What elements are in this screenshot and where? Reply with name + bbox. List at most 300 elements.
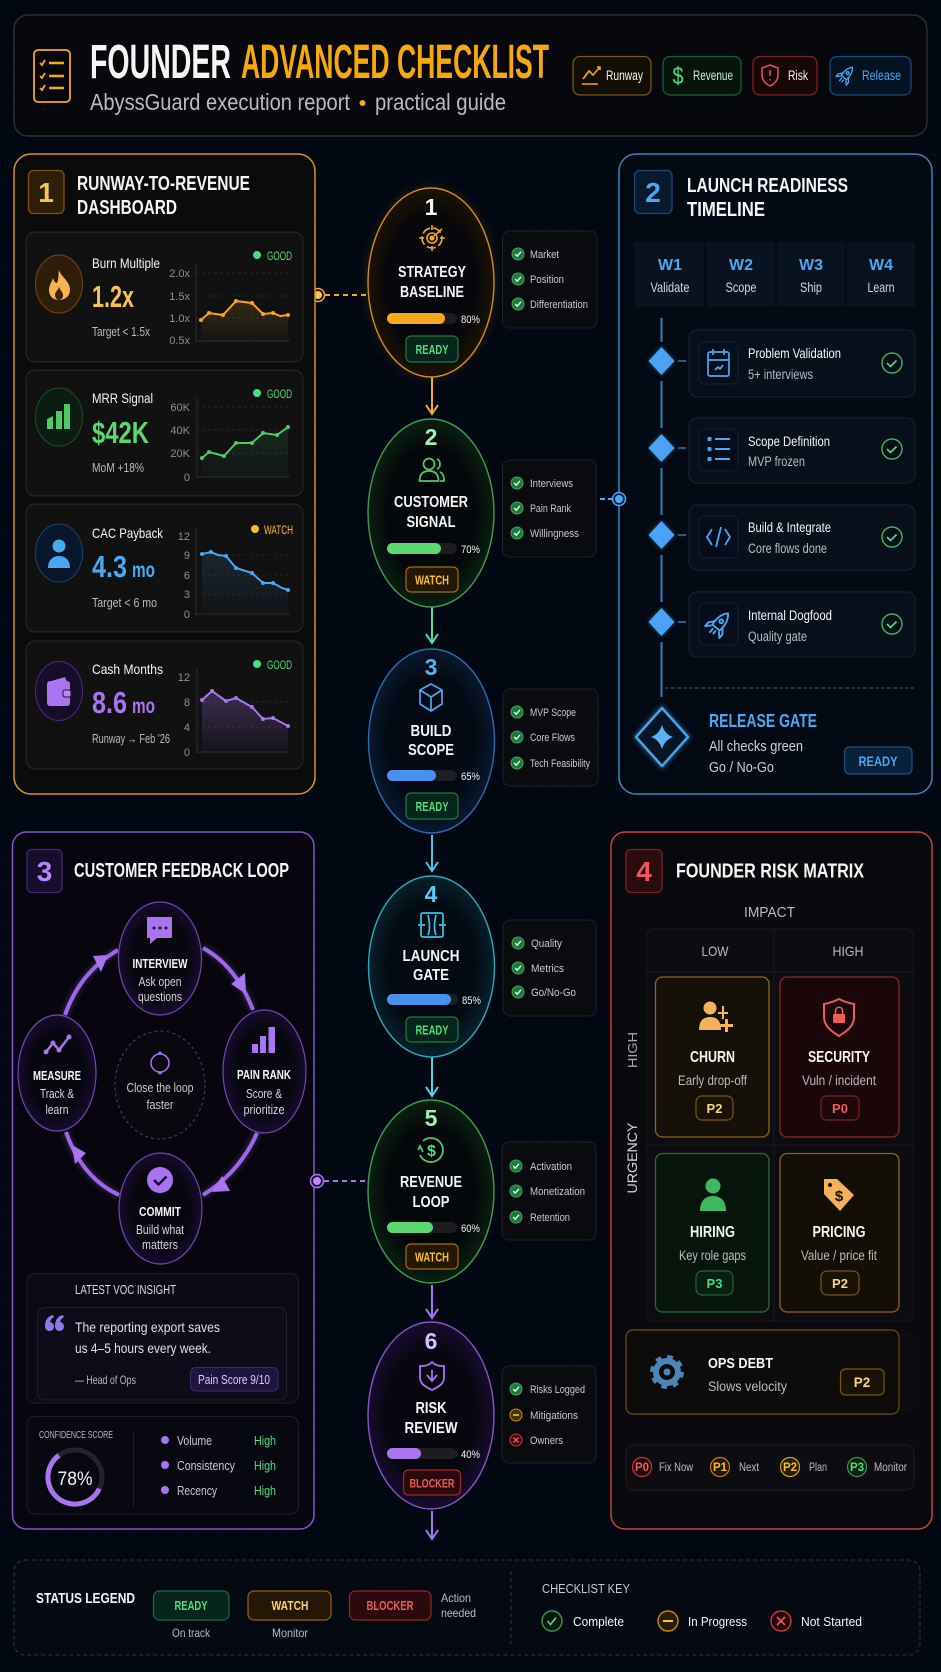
checklist: risk review: [502, 1366, 596, 1463]
chip: runway: [573, 56, 651, 95]
step 5: revenue loop: REVENUE: [400, 1174, 462, 1191]
icon: gate diamond: [636, 708, 688, 766]
card: internal dogfood: Quality gate: [748, 629, 807, 644]
cell: hiring: P3: [707, 1276, 722, 1291]
checklist: launch gate: [503, 920, 596, 1016]
icon: bars: [36, 388, 82, 446]
card: mrr signal: [26, 370, 303, 496]
node: interview: Ask open: [138, 975, 182, 989]
status: good: [253, 251, 292, 263]
icon: dollar loop: [418, 1138, 443, 1162]
matrix grid: [647, 929, 913, 1321]
checklist: risk review: Risks Logged: [530, 1384, 585, 1396]
badge 3: 3: [37, 856, 52, 887]
card: problem validation: [689, 330, 915, 397]
step 1: strategy baseline: 1: [425, 194, 438, 220]
step 2: customer signal: SIGNAL: [406, 514, 456, 531]
status: good: [253, 660, 292, 672]
step 6: risk review: RISK: [416, 1400, 447, 1417]
confidence factors: [161, 1434, 276, 1498]
confidence score: CONFIDENCE SCORE: [39, 1430, 113, 1441]
chip: runway: Runway: [606, 68, 643, 83]
connector: step 2 to timeline: [600, 498, 612, 500]
progress bar 80%: 80%: [461, 314, 480, 326]
progress bar 85%: 85%: [462, 995, 481, 1007]
metric text: MRR Signal: [92, 390, 153, 406]
checklist: strategy baseline: Differentiation: [530, 299, 588, 311]
matrix grid: LOW: [702, 943, 729, 959]
checklist: risk review: Owners: [530, 1435, 563, 1447]
checklist: customer signal: [502, 460, 596, 557]
line chart: cac: [178, 528, 290, 621]
release gate: All checks green: [709, 738, 803, 755]
icon: shield lock: [824, 999, 854, 1036]
card: problem validation: 5+ interviews: [748, 367, 813, 382]
checklist key: CHECKLIST KEY: [542, 1581, 630, 1596]
heading: [687, 175, 848, 221]
progress bar 60%: [387, 1222, 480, 1235]
icon: wallet: [36, 662, 82, 720]
step 5: revenue loop: LOOP: [412, 1194, 450, 1211]
node: interview: INTERVIEW: [132, 957, 188, 971]
cell: churn: P2: [707, 1101, 722, 1116]
line chart: mrr: 40K: [170, 425, 191, 437]
card: cac payback: [26, 504, 303, 632]
release gate: Go / No-Go: [709, 759, 774, 776]
icon: dollar loop: $: [427, 1143, 436, 1160]
icon: checklist: [34, 50, 70, 102]
cell: hiring: HIRING: [690, 1224, 735, 1241]
status: blocker: BLOCKER: [410, 1476, 455, 1490]
arrow: step 3 to 4: [426, 835, 438, 871]
badge 1: 1: [38, 177, 54, 208]
voc insight: Pain Score 9/10: [198, 1373, 270, 1387]
node: measure: learn: [46, 1103, 69, 1117]
checklist key: In Progress: [688, 1614, 747, 1629]
progress bar 85%: [387, 994, 481, 1007]
confidence factors: Recency: [177, 1484, 218, 1498]
status: good: GOOD: [267, 389, 292, 401]
icon: person: [700, 1178, 726, 1211]
checklist: customer signal: Interviews: [530, 478, 573, 490]
cell: churn: CHURN: [690, 1049, 735, 1066]
status legend: [36, 1591, 476, 1640]
checklist: launch gate: Metrics: [531, 963, 564, 975]
center note: Close the loop: [126, 1081, 194, 1095]
checklist: launch gate: Quality: [531, 938, 562, 950]
card: cash months: [26, 641, 303, 769]
status: watch: [406, 1244, 458, 1269]
heading: LAUNCH READINESS: [687, 175, 848, 197]
panel: runway-to-revenue dashboard: [14, 154, 315, 794]
metric text: Burn Multiple: [92, 255, 160, 271]
metric text: Target < 6 mo: [92, 595, 157, 610]
confidence factors: High: [254, 1459, 276, 1473]
progress bar 40%: [387, 1448, 480, 1461]
card: build and integrate: [689, 505, 915, 570]
progress bar 70%: 70%: [461, 544, 480, 556]
priority legend: P2: [783, 1462, 797, 1474]
release gate: READY: [858, 753, 898, 769]
icon: person plus: [699, 1002, 733, 1032]
status: watch: [406, 567, 458, 592]
step 1: strategy baseline: STRATEGY: [398, 264, 466, 281]
badge 1: [28, 170, 64, 214]
arrow: step 6 onward: [426, 1511, 438, 1539]
metric text: Cash Months: [92, 661, 163, 677]
node: interview: questions: [138, 990, 182, 1004]
checklist: customer signal: Pain Rank: [530, 503, 571, 515]
week tabs: W1: [658, 257, 682, 274]
node: pain rank: Score &: [246, 1087, 283, 1101]
line chart: cac: 9: [184, 550, 190, 562]
icon: calendar: [708, 349, 729, 376]
connector node: [612, 492, 626, 506]
line chart: mrr: 60K: [170, 402, 191, 414]
chip: release: Release: [862, 68, 901, 83]
metric text: [92, 255, 160, 339]
cell: ops debt: [626, 1330, 913, 1414]
icon: gear: [652, 1358, 682, 1386]
node: pain rank: [223, 1010, 306, 1133]
confidence factors: Volume: [177, 1434, 212, 1448]
badge 3: [27, 850, 62, 892]
heading: FOUNDER RISK MATRIX: [676, 860, 865, 882]
week tabs: Ship: [800, 279, 822, 295]
icon: quote: [45, 1315, 64, 1331]
step 1: strategy baseline: [368, 188, 494, 377]
icon: flame: [36, 255, 82, 313]
confidence score: [27, 1416, 298, 1514]
line chart: burn multiple: 0.5x: [169, 335, 190, 347]
metric text: [92, 661, 170, 746]
status: blocker: [404, 1470, 460, 1495]
arrow: step 2 to 3: [426, 607, 438, 643]
node: commit: COMMIT: [139, 1205, 181, 1219]
confidence factors: High: [254, 1434, 276, 1448]
metric text: MoM +18%: [92, 460, 144, 475]
arrow: step 1 to 2: [426, 377, 438, 414]
checklist key: [542, 1581, 862, 1631]
card: scope definition: [689, 418, 915, 483]
step 6: risk review: 6: [425, 1328, 437, 1354]
badge 4: 4: [636, 856, 652, 887]
checklist: revenue loop: [502, 1142, 596, 1240]
priority legend: P1: [713, 1462, 728, 1474]
card: internal dogfood: [689, 592, 915, 657]
priority legend: Next: [739, 1462, 760, 1474]
checklist key: Complete: [573, 1614, 624, 1629]
voc insight: — Head of Ops: [75, 1373, 136, 1387]
week tabs: Learn: [868, 279, 894, 295]
heading: TIMELINE: [687, 199, 765, 221]
priority legend: [626, 1445, 914, 1490]
priority legend: Plan: [809, 1462, 827, 1474]
cell: pricing: P2: [832, 1276, 848, 1291]
status legend: needed: [441, 1606, 476, 1620]
heading: [77, 173, 250, 219]
checklist key: Not Started: [801, 1614, 862, 1629]
heading: RUNWAY-TO-REVENUE: [77, 173, 250, 195]
status: watch: WATCH: [415, 1250, 449, 1264]
status legend: WATCH: [272, 1599, 308, 1613]
status legend panel: [14, 1560, 920, 1655]
connector node: [310, 1174, 324, 1188]
title: [90, 36, 549, 89]
card: burn multiple: [26, 232, 303, 362]
step 5: revenue loop: [368, 1100, 494, 1283]
cell: security: SECURITY: [808, 1049, 871, 1066]
confidence factors: High: [254, 1484, 276, 1498]
chip: revenue: [663, 56, 741, 95]
card: problem validation: Problem Validation: [748, 345, 841, 361]
metric text: $42K: [92, 415, 149, 450]
week tabs: [634, 242, 915, 307]
release gate: RELEASE GATE: [709, 711, 817, 731]
axis label: urgency high: HIGH: [625, 1032, 640, 1068]
status: ready: [406, 336, 458, 362]
icon: rocket: [704, 607, 735, 640]
cell: hiring: Key role gaps: [679, 1248, 746, 1263]
icon: cube: [420, 684, 442, 711]
confidence factors: Consistency: [177, 1459, 236, 1473]
title: ADVANCED CHECKLIST: [241, 36, 549, 89]
cell: pricing: [780, 1154, 899, 1312]
step 6: risk review: [368, 1322, 494, 1509]
icon: target: [419, 225, 445, 251]
voc insight: us 4–5 hours every week.: [75, 1340, 211, 1356]
checklist: build scope: [503, 689, 598, 786]
chip: revenue: Revenue: [693, 68, 733, 83]
priority legend: Monitor: [874, 1462, 907, 1474]
node: commit: matters: [142, 1238, 178, 1252]
line chart: mrr: 20K: [170, 448, 191, 460]
icon: bars: [252, 1027, 275, 1053]
cell: pricing: Value / price fit: [801, 1248, 877, 1263]
status: good: GOOD: [267, 660, 292, 672]
line chart: mrr: 0: [184, 472, 190, 484]
checklist: customer signal: Willingness: [530, 528, 579, 540]
donut: 78%: [48, 1450, 102, 1504]
line chart: burn multiple: 2.0x: [169, 268, 190, 280]
donut: 78%: 78%: [58, 1469, 93, 1490]
release gate: [636, 708, 912, 776]
progress bar 60%: 60%: [461, 1223, 480, 1235]
step 1: strategy baseline: BASELINE: [400, 284, 464, 301]
node: interview: [118, 902, 202, 1015]
priority legend: P3: [850, 1462, 864, 1474]
metric text: 4.3: [92, 549, 127, 584]
axis label: urgency: URGENCY: [624, 1122, 640, 1193]
week tabs: W2: [729, 257, 753, 274]
checklist: revenue loop: Activation: [530, 1161, 572, 1173]
progress bar 65%: [387, 770, 480, 783]
arrow: step 5 to 6: [426, 1285, 438, 1318]
metric text: Target < 1.5x: [92, 324, 150, 339]
status: watch: WATCH: [264, 525, 293, 537]
card: scope definition: Scope Definition: [748, 433, 830, 449]
badge 2: [634, 170, 672, 214]
step 4: launch gate: [368, 876, 494, 1057]
metric text: mo: [132, 559, 155, 582]
checklist: revenue loop: Monetization: [530, 1186, 585, 1198]
card: scope definition: MVP frozen: [748, 454, 805, 469]
status legend: BLOCKER: [366, 1599, 414, 1613]
cell: pricing: PRICING: [812, 1224, 866, 1241]
priority legend: Fix Now: [659, 1462, 694, 1474]
step 3: build scope: [368, 649, 494, 833]
icon: cycle: [151, 1052, 169, 1074]
step 2: customer signal: 2: [425, 424, 437, 450]
step 3: build scope: 3: [425, 654, 437, 680]
panel: launch readiness timeline: [612, 154, 932, 794]
checklist: build scope: Core Flows: [530, 732, 575, 744]
status legend: Monitor: [272, 1626, 308, 1640]
line chart: cash: 4: [184, 722, 190, 734]
line chart: cash: 8: [184, 697, 190, 709]
checklist: strategy baseline: Market: [530, 249, 559, 261]
line chart: burn multiple: 1.0x: [169, 313, 190, 325]
week tabs: Scope: [726, 279, 757, 295]
panel: founder risk matrix: [611, 832, 932, 1529]
step 5: revenue loop: 5: [425, 1105, 438, 1131]
status: ready: READY: [416, 1024, 449, 1038]
node: pain rank: prioritize: [244, 1103, 285, 1117]
line chart: cash: 0: [184, 747, 190, 759]
metric text: CAC Payback: [92, 525, 164, 541]
title: FOUNDER: [90, 36, 231, 89]
status legend: READY: [174, 1599, 208, 1613]
status: ready: [406, 793, 458, 819]
loop arrows: [65, 948, 257, 1195]
step 4: launch gate: LAUNCH: [402, 948, 460, 965]
metric text: 8.6: [92, 685, 127, 720]
checklist: risk review: Mitigations: [530, 1410, 578, 1422]
node: measure: [18, 1015, 96, 1131]
heading: CUSTOMER FEEDBACK LOOP: [74, 860, 289, 882]
node: commit: [119, 1153, 202, 1264]
line chart: cac: 3: [184, 589, 190, 601]
checklist: strategy baseline: [502, 231, 597, 328]
cell: ops debt: Slows velocity: [708, 1379, 787, 1394]
cell: ops debt: OPS DEBT: [708, 1355, 773, 1372]
icon: price tag: $: [835, 1188, 844, 1205]
status: watch: [251, 525, 293, 537]
node: measure: Track &: [40, 1087, 75, 1101]
panel: customer feedback loop: [12, 832, 324, 1529]
progress bar 65%: 65%: [461, 771, 480, 783]
checklist: revenue loop: Retention: [530, 1212, 570, 1224]
icon: shield: [420, 1362, 444, 1390]
status: ready: READY: [416, 800, 449, 814]
icon: check badge: [147, 1167, 173, 1193]
status: good: GOOD: [267, 251, 292, 263]
subtitle: AbyssGuard execution report: [90, 89, 351, 115]
metric text: mo: [132, 695, 155, 718]
axis label: impact: IMPACT: [744, 905, 795, 921]
priority legend: P0: [635, 1462, 649, 1474]
chip: risk: [753, 56, 817, 95]
voc insight: LATEST VOC INSIGHT: [75, 1283, 176, 1297]
cell: security: Vuln / incident: [802, 1073, 876, 1088]
step 2: customer signal: CUSTOMER: [394, 494, 468, 511]
center note: [115, 1031, 205, 1139]
cell: churn: [656, 977, 769, 1137]
cell: ops debt: P2: [854, 1375, 870, 1390]
line chart: mrr: [170, 398, 290, 484]
metric text: Runway → Feb ’26: [92, 731, 170, 746]
arrow: step 4 to 5: [426, 1057, 438, 1096]
icon: chat: [147, 917, 172, 944]
checklist: build scope: Tech Feasibility: [530, 758, 590, 770]
metric text: 1.2x: [92, 279, 135, 314]
line chart: cac: 6: [184, 570, 190, 582]
line chart: burn multiple: 1.5x: [169, 291, 190, 303]
progress bar 80%: [387, 313, 480, 326]
card: build and integrate: Build & Integrate: [748, 519, 831, 535]
status legend: Action: [441, 1591, 471, 1605]
week tabs: W4: [869, 257, 893, 274]
progress bar 40%: 40%: [461, 1449, 480, 1461]
timeline spine: [648, 318, 914, 697]
connector: dashboard to step 1: [312, 288, 366, 302]
status legend: STATUS LEGEND: [36, 1591, 135, 1607]
card: internal dogfood: Internal Dogfood: [748, 607, 832, 623]
checklist: strategy baseline: Position: [530, 274, 564, 286]
cell: hiring: [656, 1154, 769, 1312]
step 3: build scope: BUILD: [410, 723, 452, 740]
card: build and integrate: Core flows done: [748, 541, 827, 556]
icon: list: [708, 437, 730, 461]
icon: gate: [418, 913, 446, 937]
checklist: launch gate: Go/No-Go: [531, 987, 576, 999]
chip: risk: Risk: [788, 68, 808, 83]
status: watch: WATCH: [415, 574, 449, 588]
chip: revenue: $: [672, 63, 684, 90]
line chart: cac: 0: [184, 609, 190, 621]
line chart: cash: 12: [178, 672, 190, 684]
metric text: [92, 390, 153, 475]
status: ready: READY: [416, 343, 449, 357]
step 4: launch gate: 4: [425, 881, 438, 907]
step 4: launch gate: GATE: [413, 967, 449, 984]
icon: price tag: [824, 1179, 854, 1211]
chip: release: [830, 56, 911, 95]
icon: code: [707, 527, 730, 547]
node: pain rank: PAIN RANK: [237, 1068, 291, 1082]
week tabs: Validate: [650, 279, 690, 295]
step 2: customer signal: [368, 419, 494, 607]
line chart: cac: 12: [178, 531, 190, 543]
node: commit: Build what: [136, 1223, 184, 1237]
heading: DASHBOARD: [77, 197, 177, 219]
node: measure: MEASURE: [33, 1069, 81, 1083]
status legend: On track: [172, 1626, 211, 1640]
step 6: risk review: REVIEW: [404, 1420, 458, 1437]
connector: feedback loop to step 5: [324, 1180, 367, 1182]
week tabs: W3: [799, 257, 823, 274]
step 3: build scope: SCOPE: [408, 742, 454, 759]
line chart: cash: [178, 668, 290, 759]
icon: person: [36, 524, 82, 582]
subtitle: practical guide: [375, 89, 506, 115]
cell: security: [780, 977, 899, 1137]
icon: users: [420, 458, 444, 481]
status: ready: [406, 1017, 458, 1042]
badge 4: [626, 850, 662, 892]
cell: security: P0: [832, 1101, 848, 1116]
checklist: build scope: MVP Scope: [530, 707, 576, 719]
